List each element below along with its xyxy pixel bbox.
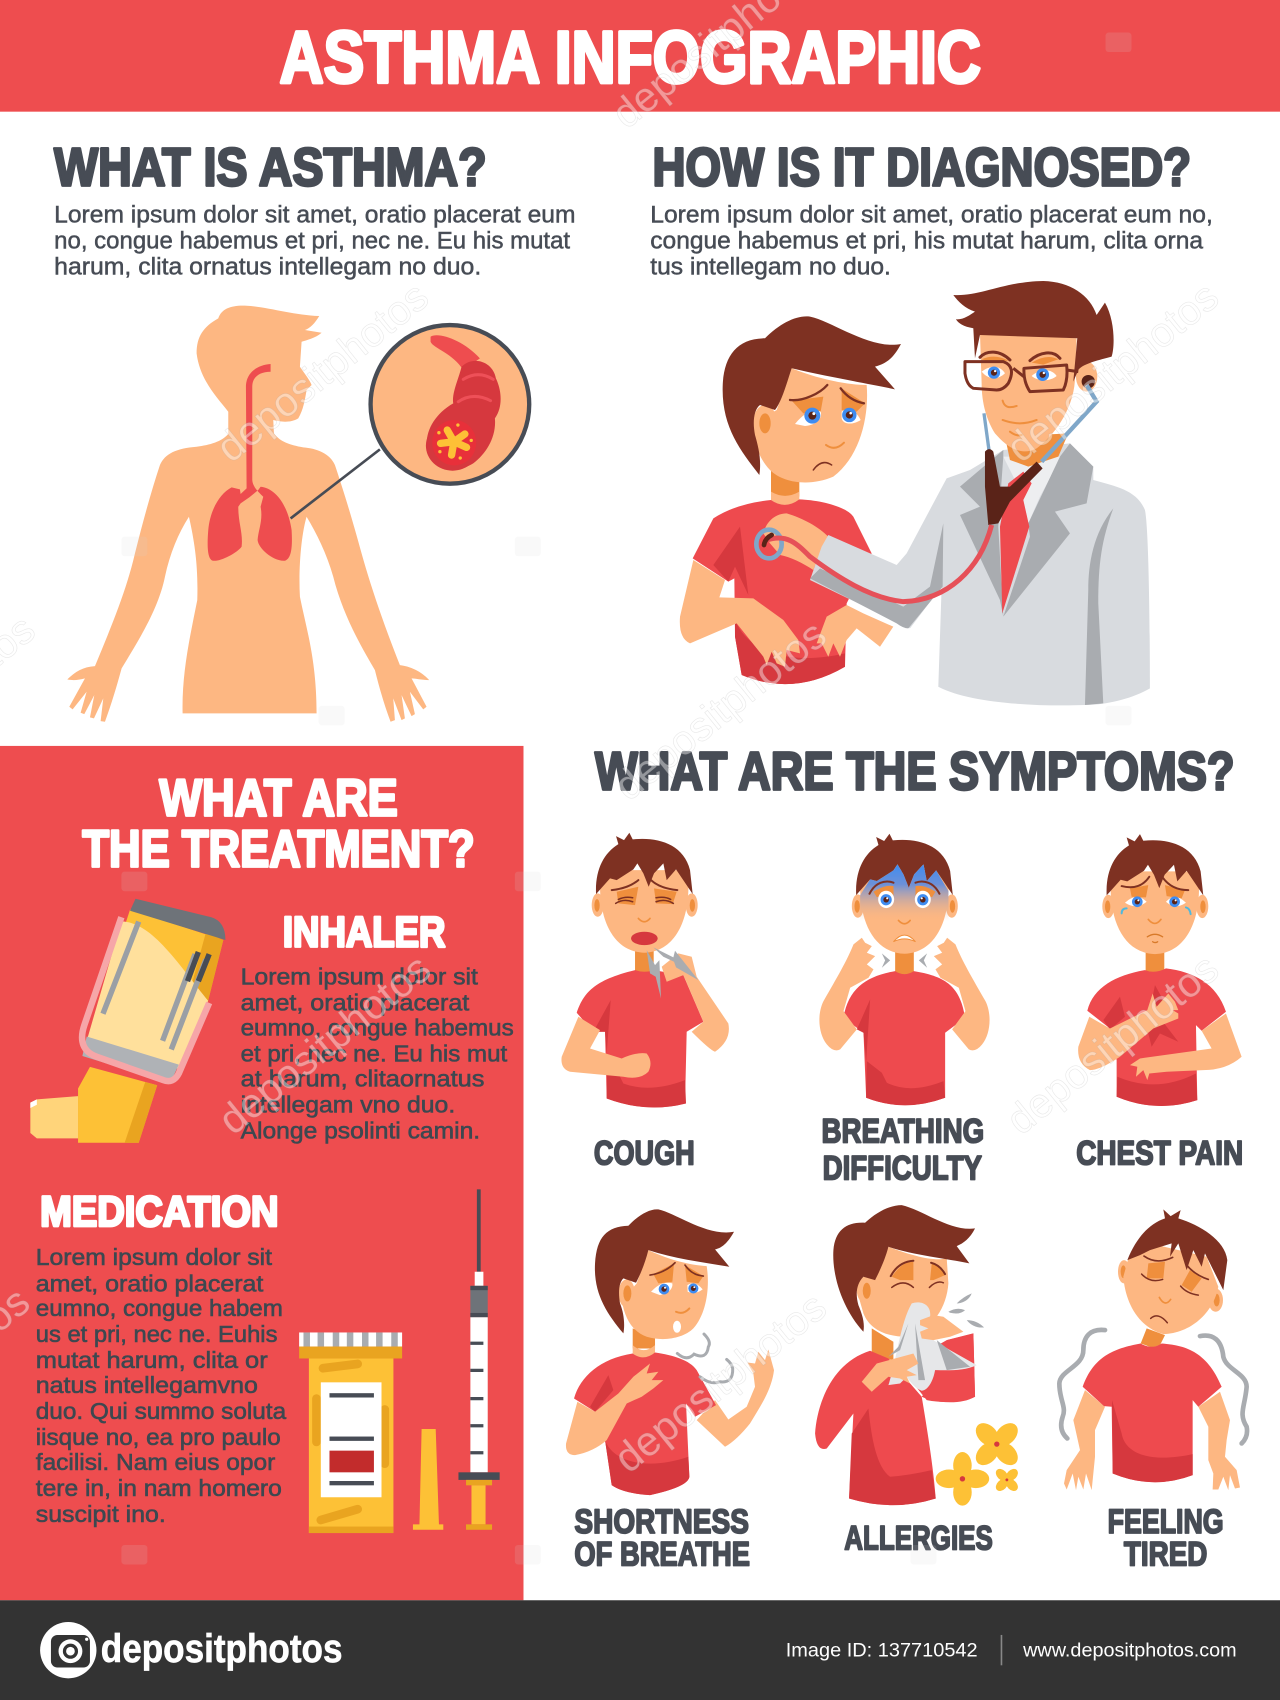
label: feeling tired: TIRED xyxy=(1124,1536,1207,1574)
icon: syringe xyxy=(458,1189,500,1530)
heading: treatment: WHAT ARE xyxy=(159,769,398,827)
image id: Image ID: 137710542 xyxy=(786,1640,978,1662)
icon: flowers xyxy=(936,1406,1035,1506)
paragraph: what is asthma: no, congue habemus et pri, nec ne. Eu his mutat xyxy=(54,227,570,254)
watermarks: depositphotos xyxy=(998,945,1227,1143)
symptom: shortness of breath xyxy=(566,1209,774,1574)
paragraph: inhaler: intellegam vno duo. xyxy=(241,1091,455,1117)
symptom: cough xyxy=(561,833,729,1172)
website: www.depositphotos.com xyxy=(1022,1640,1237,1662)
label: shortness of breathe: OF BREATHE xyxy=(574,1536,750,1574)
label: cough: COUGH xyxy=(594,1134,695,1172)
symptom: breathing difficulty xyxy=(819,834,990,1188)
watermarks: depositphotos xyxy=(605,611,835,809)
stethoscope xyxy=(756,385,1097,602)
watermarks: depositphotos xyxy=(605,1283,835,1481)
label: shortness of breathe xyxy=(574,1503,750,1574)
paragraph: diagnosed: tus intellegam no duo. xyxy=(650,253,891,280)
panel: how is it diagnosed text xyxy=(650,137,1213,280)
doctor coat xyxy=(810,433,1150,705)
paragraph: inhaler xyxy=(241,963,514,1143)
paragraph: inhaler: eumno, congue habemus xyxy=(241,1014,514,1040)
body silhouette xyxy=(67,306,429,722)
label: breathing difficulty: BREATHING xyxy=(822,1113,984,1151)
paragraph: medication: mutat harum, clita or xyxy=(36,1347,268,1373)
logo wordmark: depositphotos xyxy=(101,1627,342,1671)
symptom: allergies xyxy=(815,1205,1035,1557)
paragraph: diagnosed xyxy=(650,201,1213,280)
heading: inhaler: INHALER xyxy=(283,908,445,955)
illustration: doctor examining boy xyxy=(680,281,1150,705)
paragraph: inhaler: Lorem ipsum dolor sit xyxy=(241,963,479,989)
label: feeling tired: FEELING xyxy=(1108,1503,1224,1541)
paragraph: medication: us et pri, nec ne. Euhis xyxy=(36,1321,277,1347)
paragraph: medication: iisque no, ea pro paulo xyxy=(36,1424,281,1450)
icon: footer camera logo xyxy=(40,1622,96,1678)
paragraph: inhaler: Alonge psolinti camin. xyxy=(241,1117,480,1143)
figure: breathing difficulty xyxy=(819,834,990,1105)
panel: what is asthma text xyxy=(54,137,576,280)
boy neck xyxy=(771,468,799,506)
figure: cough xyxy=(561,833,729,1107)
label: chest pain: CHEST PAIN xyxy=(1076,1134,1243,1172)
icon: syringe cap xyxy=(413,1429,443,1530)
paragraph: diagnosed: Lorem ipsum dolor sit amet, oratio placerat eum no, xyxy=(650,201,1213,228)
boy arms xyxy=(680,560,893,667)
tie xyxy=(1000,472,1032,613)
header banner xyxy=(0,0,1280,112)
watermarks: depositphotos xyxy=(208,273,437,471)
doctor head xyxy=(953,281,1114,451)
paragraph: medication: amet, oratio placerat xyxy=(36,1270,264,1296)
title: ASTHMA INFOGRAPHIC xyxy=(280,15,981,98)
bronchus xyxy=(426,335,501,471)
icon: inhaler xyxy=(30,899,225,1143)
paragraph: medication: tere in, in nam homero xyxy=(36,1475,282,1501)
paragraph: diagnosed: congue habemus et pri, his mutat harum, clita orna xyxy=(650,227,1204,254)
illustration: human body with lungs and bronchus callout xyxy=(67,306,529,722)
paragraph: inhaler: amet, oratio placerat xyxy=(241,989,470,1015)
boy head xyxy=(723,316,901,482)
doctor hand xyxy=(763,513,828,570)
paragraph: inhaler: at harum, clitaornatus xyxy=(241,1065,484,1091)
heading: treatment xyxy=(82,769,475,878)
lungs and trachea xyxy=(208,364,292,561)
symptom: chest pain xyxy=(1076,834,1243,1172)
paragraph: what is asthma: harum, clita ornatus intellegam no duo. xyxy=(54,253,481,280)
paragraph: what is asthma xyxy=(54,201,576,280)
paragraph: medication: facilisi. Nam eius opor xyxy=(36,1449,276,1475)
label: breathing difficulty xyxy=(822,1113,984,1188)
figure: shortness xyxy=(566,1209,774,1495)
label: feeling tired xyxy=(1108,1503,1224,1574)
watermarks: depositphotos xyxy=(210,945,439,1143)
symptom: feeling tired xyxy=(1059,1209,1247,1574)
callout circle xyxy=(371,325,529,484)
paragraph: medication: Lorem ipsum dolor sit xyxy=(36,1244,273,1270)
heading: medication: MEDICATION xyxy=(40,1188,279,1235)
heading: diagnosed: HOW IS IT DIAGNOSED? xyxy=(652,137,1191,197)
heading: what is asthma: WHAT IS ASTHMA? xyxy=(54,137,487,197)
boy shirt xyxy=(693,499,872,684)
icon: pill bottle xyxy=(299,1332,402,1533)
paragraph: medication xyxy=(36,1244,286,1527)
figure: allergies xyxy=(815,1205,984,1505)
footer bar xyxy=(0,1600,1280,1700)
figure: chest pain xyxy=(1078,834,1242,1106)
paragraph: medication: suscipit ino. xyxy=(36,1501,166,1527)
heading: treatment: THE TREATMENT? xyxy=(82,820,475,878)
paragraph: medication: duo. Qui summo soluta xyxy=(36,1398,286,1424)
panel: treatment xyxy=(0,746,523,1600)
figure: feeling tired xyxy=(1059,1209,1247,1490)
label: shortness of breathe: SHORTNESS xyxy=(574,1503,749,1541)
paragraph: medication: eumno, congue habem xyxy=(36,1295,283,1321)
paragraph: inhaler: et pri, nec ne. Eu his mut xyxy=(241,1040,508,1066)
watermarks: depositphotos xyxy=(998,273,1227,471)
paragraph: what is asthma: Lorem ipsum dolor sit amet, oratio placerat eum xyxy=(54,201,576,228)
callout line xyxy=(291,449,380,518)
paragraph: medication: natus intellegamvno xyxy=(36,1372,258,1398)
label: allergies: ALLERGIES xyxy=(844,1519,993,1557)
label: breathing difficulty: DIFFICULTY xyxy=(823,1150,982,1188)
